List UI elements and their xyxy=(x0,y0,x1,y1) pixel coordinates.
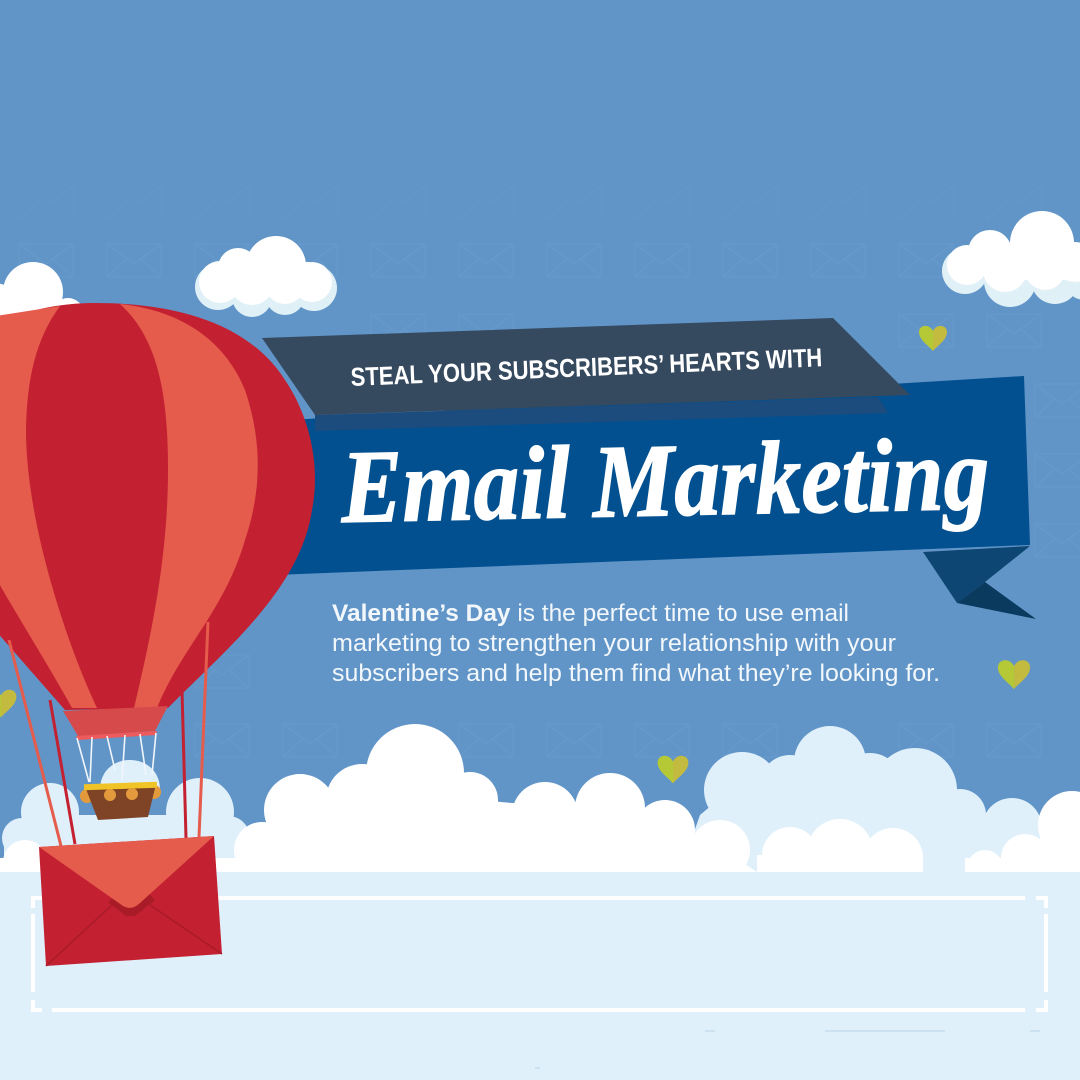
body text: subscribers and help them find what they’re looking for. xyxy=(332,660,940,687)
heart: lower right xyxy=(998,660,1030,689)
balloon: basket xyxy=(80,782,161,820)
bottom panel xyxy=(0,872,1080,1080)
subtitle: STEAL YOUR SUBSCRIBERS’ HEARTS WITH xyxy=(350,342,823,392)
cloud: top right xyxy=(942,211,1080,307)
heart: left edge xyxy=(0,690,16,717)
balloon: neck rim xyxy=(76,731,157,740)
body text: Valentine’s Day is the perfect time to use email xyxy=(332,600,849,627)
cloud: top left xyxy=(0,262,84,330)
balloon: envelope red xyxy=(0,303,315,710)
cloud: top centre xyxy=(195,236,337,317)
balloon: envelope suspension lines xyxy=(9,622,208,846)
balloon: basket ropes xyxy=(77,733,156,782)
balloon: left light stripe xyxy=(0,306,97,708)
ribbon: tail fold xyxy=(923,546,1030,603)
balloon: neck xyxy=(63,706,168,736)
red envelope xyxy=(39,836,222,966)
ribbon xyxy=(262,318,1036,619)
heart: centre xyxy=(658,756,688,783)
balloon: right light stripe xyxy=(120,304,258,708)
back clouds: pale layer xyxy=(2,726,1042,872)
ribbon: fold shadow xyxy=(315,397,888,431)
envelope background pattern xyxy=(19,186,1080,757)
title: Email Marketing xyxy=(339,416,990,545)
faint rule remnants xyxy=(535,1031,1040,1068)
hot air balloon xyxy=(0,303,315,966)
front clouds: white layer xyxy=(0,724,1080,888)
body text xyxy=(332,600,940,687)
dashed white frame xyxy=(33,898,1046,1010)
ribbon: main blue band xyxy=(275,376,1030,575)
body text: marketing to strengthen your relationship with your xyxy=(332,630,896,657)
ribbon: tail tip xyxy=(957,582,1036,619)
heart: upper right xyxy=(919,326,947,351)
ribbon: upper dark band xyxy=(262,318,910,415)
balloon: pale cloud behind basket xyxy=(100,760,160,790)
